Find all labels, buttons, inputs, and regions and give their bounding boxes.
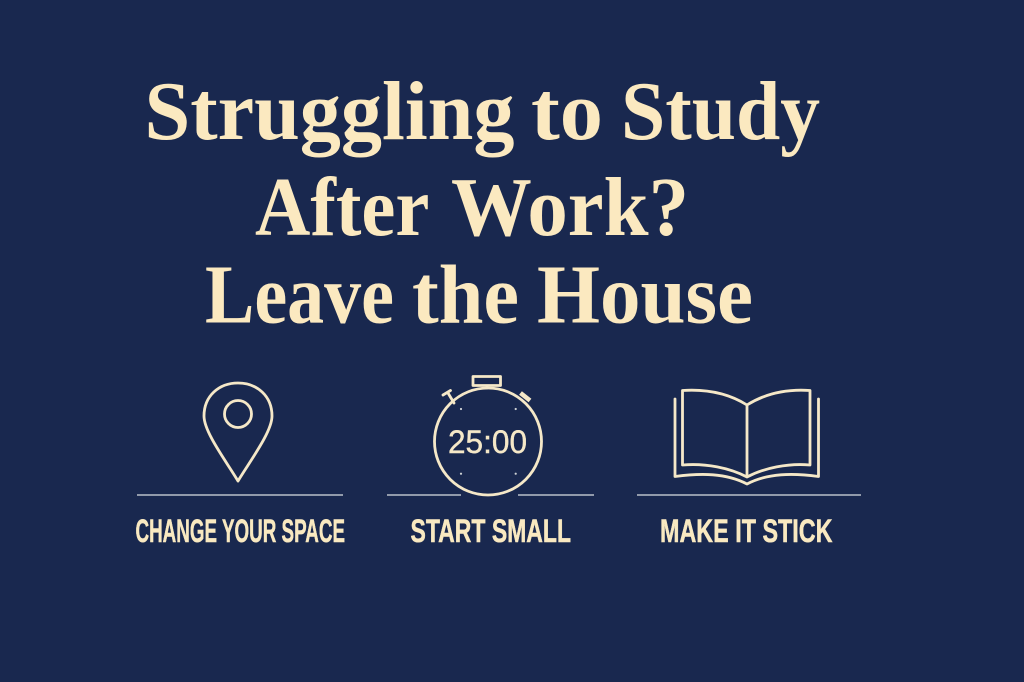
label: change your space: CHANGE YOUR SPACE (136, 513, 345, 549)
title: Leave (205, 248, 394, 342)
column: make it stick (637, 390, 861, 549)
label: start small: START SMALL (410, 513, 571, 549)
icon: stopwatch (434, 376, 542, 495)
divider line left (387, 494, 461, 496)
title: the (412, 248, 519, 342)
icon: open book (675, 390, 818, 484)
column: start small (387, 376, 594, 549)
divider line right (518, 494, 594, 496)
title: Struggling (144, 65, 514, 158)
title: House (537, 248, 753, 342)
timer reading: 25:00 (448, 424, 527, 460)
title: to (531, 65, 603, 158)
divider line (637, 494, 861, 496)
icon: location pin (204, 383, 272, 481)
divider line (137, 494, 343, 496)
title (144, 65, 820, 342)
title: Study (621, 65, 820, 158)
title: After (255, 161, 428, 254)
column: change your space (136, 383, 345, 549)
title: Work? (451, 161, 689, 254)
label: make it stick: MAKE IT STICK (660, 513, 832, 549)
